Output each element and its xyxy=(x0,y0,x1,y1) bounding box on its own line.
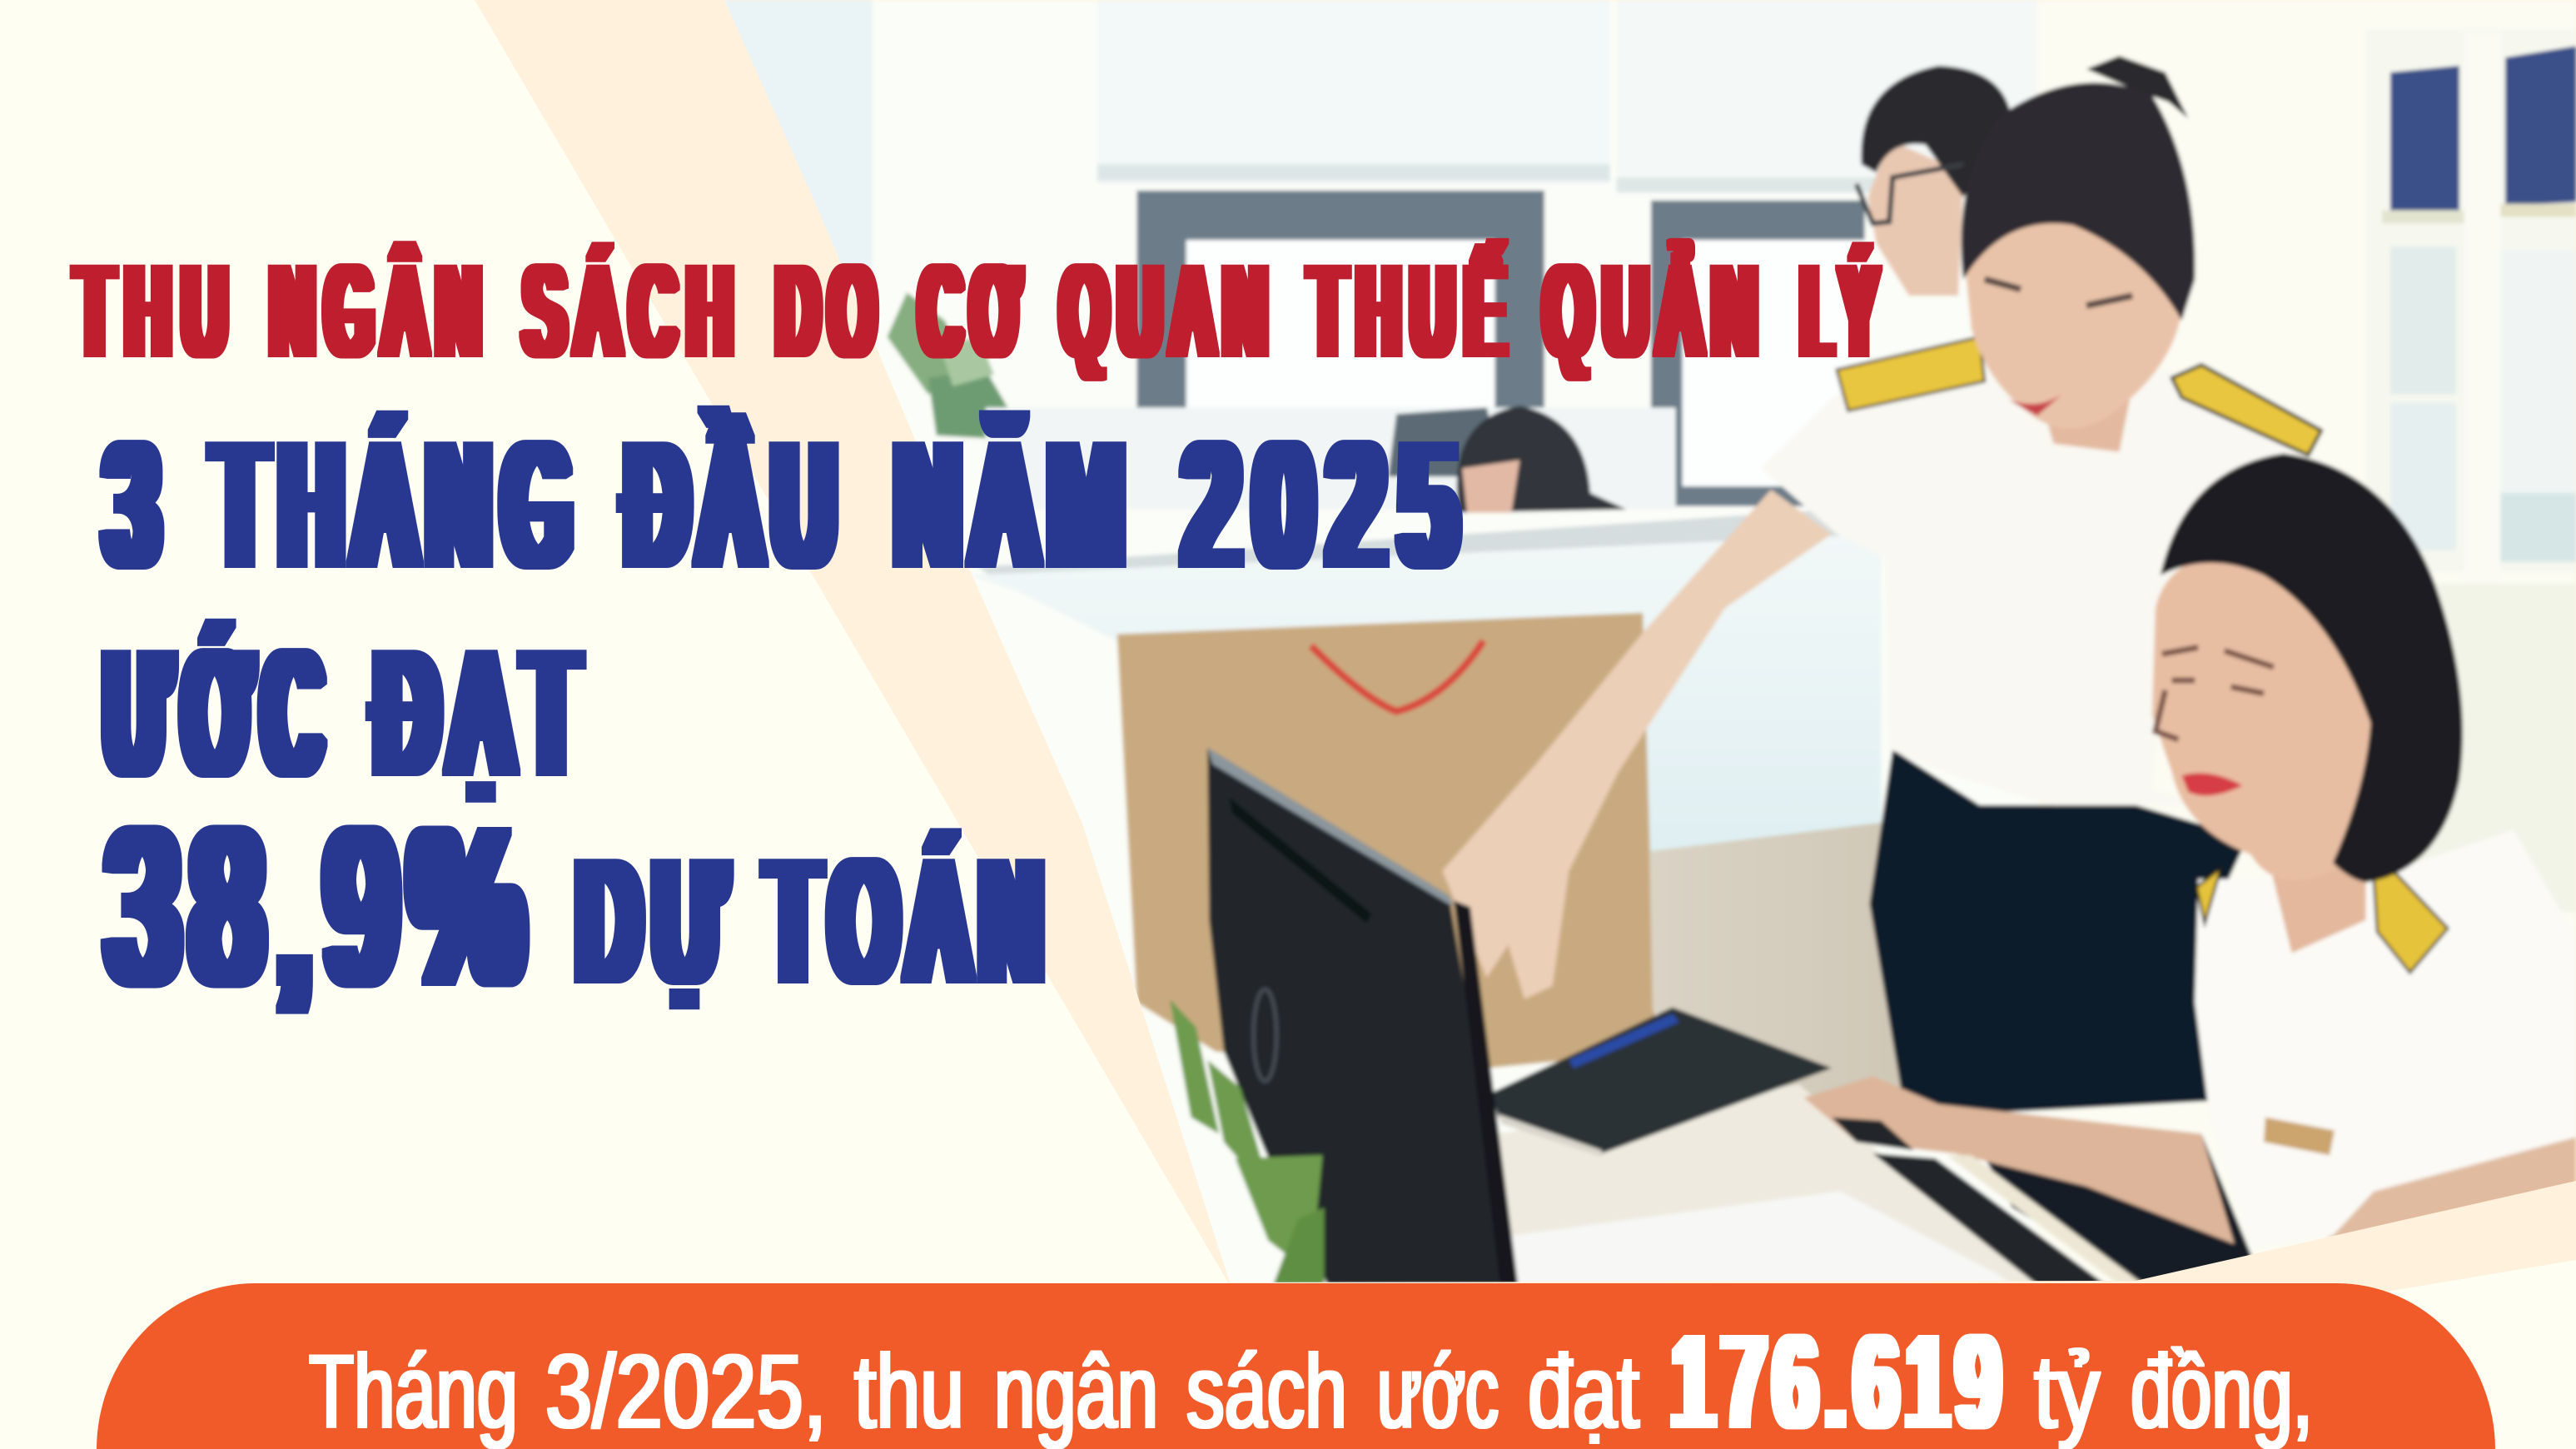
standing officer arm xyxy=(1442,490,1832,999)
standing officer skirt xyxy=(1870,749,2247,1118)
callout text: ước xyxy=(1377,1334,1499,1449)
title line: red: DO xyxy=(778,240,887,382)
seated officer brows, eyes and nose xyxy=(2156,647,2274,739)
orange callout panel xyxy=(97,1283,2495,1449)
seated officer hair xyxy=(2161,454,2463,883)
headline percentage: 38,9% xyxy=(108,784,537,1028)
wood panel wall xyxy=(1649,822,1906,1118)
title line: period: 2025 xyxy=(1185,408,1474,602)
desk xyxy=(1499,1084,2037,1285)
peach diagonal band xyxy=(475,0,2576,1292)
callout text xyxy=(309,1334,2313,1449)
callout text: đạt xyxy=(1528,1334,1639,1449)
title line: red: THU xyxy=(77,240,240,382)
title line: red xyxy=(77,240,1887,382)
upper blinds xyxy=(1097,160,1875,194)
title line: red: QUẢN xyxy=(1545,240,1769,382)
keyboard xyxy=(1832,1118,2144,1285)
text: LÝ xyxy=(1803,240,1887,382)
epaulette left xyxy=(1837,337,1985,411)
paper on desk xyxy=(1511,1192,2012,1285)
partition xyxy=(969,407,1881,888)
title line: red: THUẾ xyxy=(1310,240,1517,382)
monitor xyxy=(1207,748,1518,1285)
man in background xyxy=(1857,66,2012,296)
seated officer shirt xyxy=(2195,829,2576,1249)
right cabinet xyxy=(2365,30,2576,912)
callout text: tỷ xyxy=(2034,1334,2100,1449)
shopping bag xyxy=(1117,613,1656,1068)
name tag xyxy=(2264,1118,2335,1155)
standing officer head xyxy=(1961,56,2195,452)
title line: period: NĂM xyxy=(897,408,1139,602)
seated officer epaulettes xyxy=(2196,868,2448,973)
seated officer face xyxy=(2152,550,2382,880)
title line: red: CƠ xyxy=(921,240,1032,382)
title line: red: SÁCH xyxy=(525,240,745,382)
dark area under arm xyxy=(1985,1136,2254,1281)
title line: budget: DỰ xyxy=(579,825,743,1017)
epaulette right xyxy=(2172,365,2321,456)
title line: period: THÁNG xyxy=(215,408,585,602)
title line: red: NGÂN xyxy=(271,240,493,382)
seated officer lips xyxy=(2181,773,2242,796)
plant foreground xyxy=(1170,999,1324,1285)
callout text: đồng, xyxy=(2131,1334,2313,1449)
text: ĐẠT xyxy=(376,616,594,810)
background colleague xyxy=(1388,406,1626,513)
title line: period xyxy=(107,407,1474,602)
callout text: ngân xyxy=(994,1334,1158,1449)
seated officer neck xyxy=(2267,838,2365,953)
title line: estimate: ƯỚC xyxy=(107,616,334,810)
window frames xyxy=(1136,191,1867,506)
title line: period: ĐẦU xyxy=(627,407,850,602)
callout text: Tháng xyxy=(309,1334,518,1449)
callout text: 3/2025, xyxy=(545,1334,827,1449)
seated officer arm and hand xyxy=(1804,1076,2576,1249)
standing officer shirt xyxy=(1764,395,2135,810)
photo: tax officers at a computer xyxy=(724,0,2576,1282)
callout text: thu xyxy=(854,1334,964,1449)
callout text: sách xyxy=(1186,1334,1347,1449)
title line: period: 3 xyxy=(107,408,175,602)
text: TOÁN xyxy=(768,825,1057,1017)
plant behind xyxy=(886,291,1009,441)
notebook and pen xyxy=(1492,1008,1832,1157)
title line: red: QUAN xyxy=(1062,240,1279,382)
callout figure: 176.619 xyxy=(1672,1310,2008,1449)
left window blind xyxy=(724,0,873,287)
